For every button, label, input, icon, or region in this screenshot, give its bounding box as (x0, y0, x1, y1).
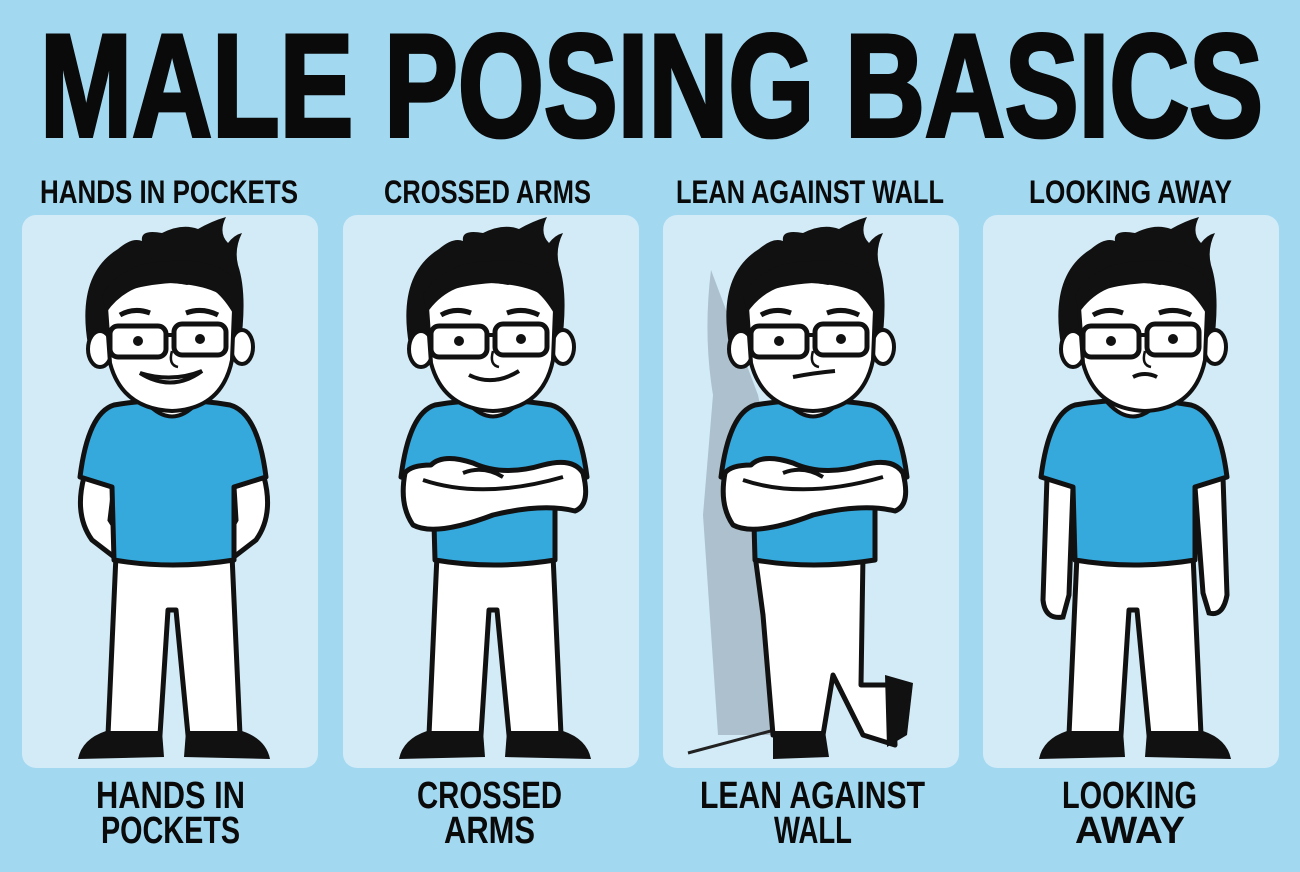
panel: looking away (983, 215, 1279, 768)
bottom label: looking away: LOOKING (1062, 775, 1197, 817)
bottom label: crossed arms (417, 775, 562, 852)
figure: looking away (1039, 217, 1231, 759)
bottom label: hands in pockets (96, 775, 245, 852)
bottom label: lean against wall: WALL (774, 810, 852, 852)
top label: crossed arms: CROSSED ARMS (384, 174, 591, 210)
bottom label: lean against wall: LEAN AGAINST (700, 775, 925, 817)
panel: crossed arms (343, 215, 639, 768)
panel: lean against wall (663, 215, 959, 768)
bottom label: looking away (1062, 775, 1197, 852)
wall shadow (703, 270, 793, 735)
figure: crossed arms (399, 217, 591, 759)
top label: looking away: LOOKING AWAY (1029, 174, 1232, 210)
bottom label: lean against wall (700, 775, 925, 852)
figure: hands in pockets (78, 217, 270, 759)
bottom label: hands in pockets: HANDS IN (96, 775, 245, 817)
top label: lean against wall: LEAN AGAINST WALL (676, 174, 944, 210)
bottom label: looking away: AWAY (1075, 810, 1185, 852)
top label: hands in pockets: HANDS IN POCKETS (40, 174, 298, 210)
bottom label: crossed arms: CROSSED (417, 775, 562, 817)
panel: hands in pockets (22, 215, 318, 768)
bottom label: hands in pockets: POCKETS (101, 810, 240, 852)
floor line (688, 725, 793, 753)
figure: leaning (721, 217, 913, 759)
bottom label: crossed arms: ARMS (444, 810, 535, 852)
